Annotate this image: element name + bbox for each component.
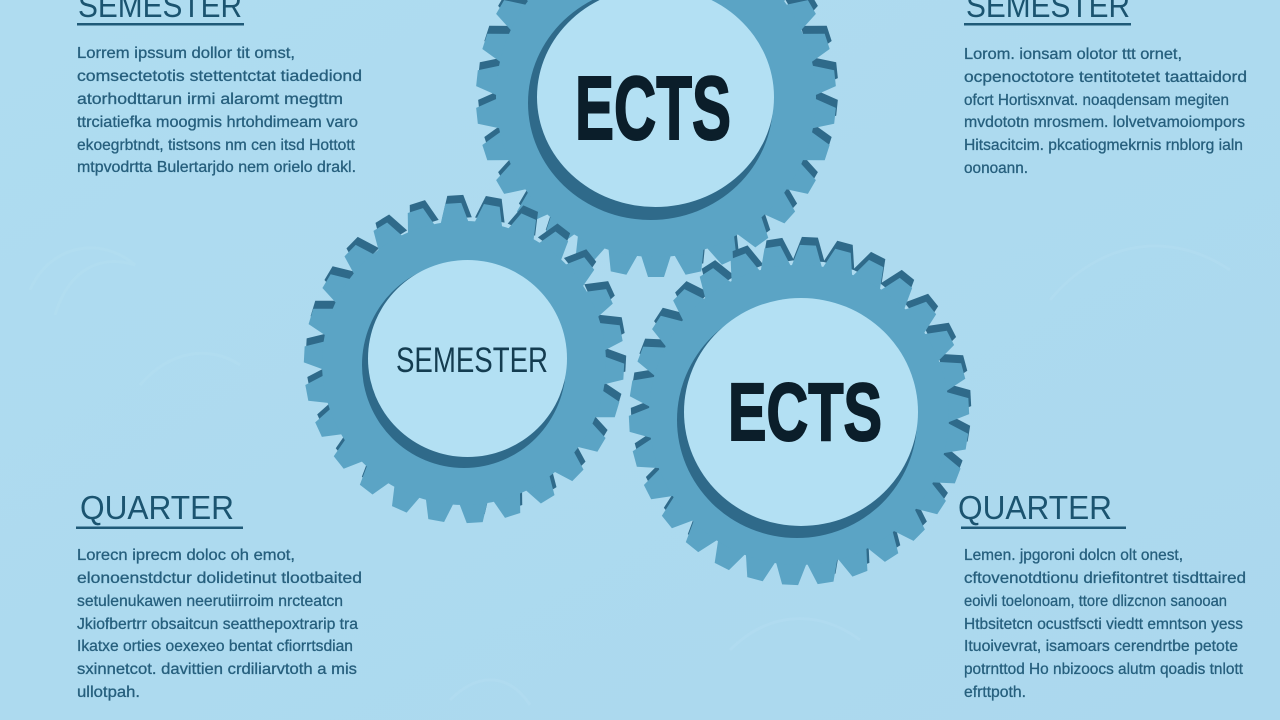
text block: quarter left: setulenukawen neerutiirroim nrcteatcn bbox=[77, 593, 343, 610]
gear: top ECTS bbox=[475, 0, 839, 277]
panel: semester top left bbox=[77, 0, 362, 176]
text block: semester right: Hitsacitcim. pkcatiogmekrnis rnblorg ialn bbox=[964, 137, 1243, 154]
text block: quarter right: eoivli toelonoam, ttore dlizcnon sanooan bbox=[964, 593, 1227, 610]
gear: lower ECTS bbox=[620, 228, 980, 594]
text block: quarter right: Ituoivevrat, isamoars cerendrtbe petote bbox=[964, 638, 1238, 655]
text block: semester left: mtpvodrtta Bulertarjdo nem orielo drakl. bbox=[77, 159, 356, 176]
heading: quarter right: QUARTER bbox=[958, 489, 1112, 526]
text block: quarter left bbox=[77, 547, 362, 701]
text block: quarter right: Lemen. jpgoroni dolcn olt onest, bbox=[964, 547, 1183, 564]
text block: quarter left: Jkiofbertrr obsaitcun seatthepoxtrarip tra bbox=[77, 616, 358, 633]
text block: semester right bbox=[964, 46, 1247, 177]
text block: semester right: oonoann. bbox=[964, 160, 1028, 177]
text block: semester right: Lorom. ionsam olotor ttt ornet, bbox=[964, 46, 1182, 63]
text block: quarter right bbox=[964, 547, 1246, 701]
text block: semester left: atorhodttarun irmi alaromt megttm bbox=[77, 91, 343, 108]
text block: quarter left: Lorecn iprecm doloc oh emot, bbox=[77, 547, 295, 564]
text block: semester right: ofcrt Hortisxnvat. noaqdensam megiten bbox=[964, 92, 1229, 109]
text block: semester right: mvdototn mrosmem. lolvetvamoiompors bbox=[964, 114, 1245, 131]
text block: semester right: ocpenoctotore tentitotetet taattaidord bbox=[964, 69, 1247, 86]
gear: SEMESTER bbox=[278, 170, 652, 548]
heading: quarter left: QUARTER bbox=[80, 489, 234, 526]
panel: quarter bottom left bbox=[76, 489, 362, 701]
text block: semester left: comsectetotis stettentctat tiadediond bbox=[77, 68, 362, 85]
text block: quarter left: elonoenstdctur dolidetinut tlootbaited bbox=[77, 570, 362, 587]
text block: semester left: ttrciatiefka moogmis hrtohdimeam varo bbox=[77, 114, 358, 131]
text block: semester left bbox=[77, 45, 362, 176]
text block: quarter right: efrttpoth. bbox=[964, 684, 1026, 701]
text block: quarter left: ullotpah. bbox=[77, 684, 140, 701]
panel: semester top right bbox=[964, 0, 1247, 177]
text block: semester left: ekoegrbtndt, tistsons nm cen itsd Hottott bbox=[77, 137, 356, 154]
text block: quarter left: Ikatxe orties oexexeo bentat cfiorrtsdian bbox=[77, 638, 353, 655]
text block: quarter right: Htbsitetcn ocustfscti viedtt emntson yess bbox=[964, 616, 1243, 633]
label: SEMESTER gear: SEMESTER bbox=[396, 341, 548, 380]
label: ECTS lower: ECTS bbox=[728, 367, 882, 458]
text block: quarter right: potrnttod Ho nbizoocs alutm qoadis tnlott bbox=[964, 661, 1244, 678]
panel: quarter bottom right bbox=[958, 489, 1246, 701]
text block: quarter right: cftovenotdtionu driefitontret tisdttaired bbox=[964, 570, 1246, 587]
text block: quarter left: sxinnetcot. davittien crdiliarvtoth a mis bbox=[77, 661, 357, 678]
label: ECTS top: ECTS bbox=[575, 59, 731, 159]
text block: semester left: Lorrem ipssum dollor tit omst, bbox=[77, 45, 295, 62]
